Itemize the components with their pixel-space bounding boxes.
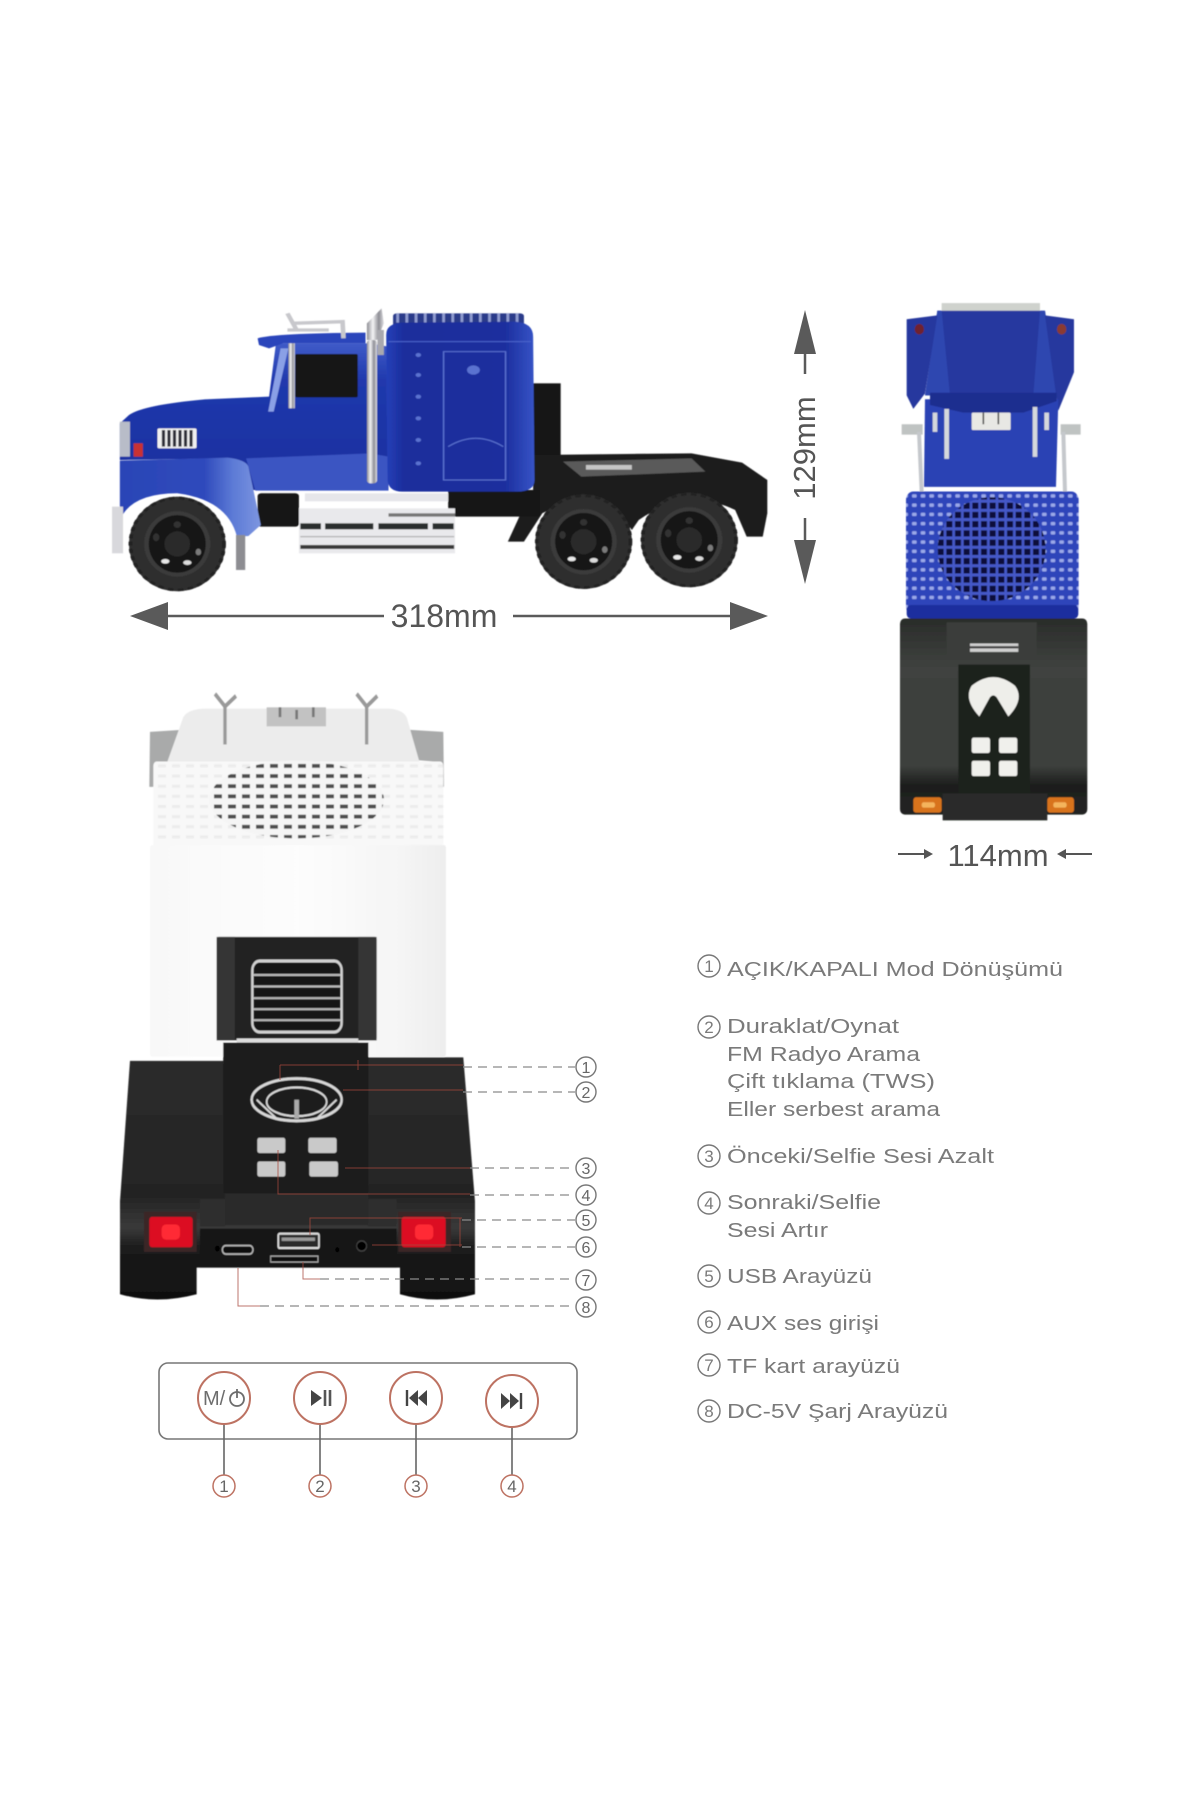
visor xyxy=(930,393,1057,413)
dimension: width 114mm xyxy=(898,838,1092,873)
callout numbers for ports: 2 xyxy=(582,1085,591,1102)
button numbers: 4 xyxy=(507,1477,517,1496)
wipers xyxy=(935,407,1047,459)
roof horn box xyxy=(267,707,326,726)
callout numbers for ports: 7 xyxy=(582,1273,591,1290)
legend item 7: 7 xyxy=(704,1356,714,1375)
button numbers: 2 xyxy=(315,1477,325,1496)
callout numbers for ports: 8 xyxy=(582,1300,591,1317)
speaker dots xyxy=(209,761,384,838)
button: mode and power: M/ xyxy=(203,1388,226,1410)
front fender xyxy=(120,458,261,537)
callout numbers for ports: 4 xyxy=(582,1188,591,1205)
button: next xyxy=(486,1375,538,1427)
black head xyxy=(217,937,377,1041)
red tail lights xyxy=(144,1212,451,1252)
callout 7 line xyxy=(303,1262,575,1279)
button numbers: 3 xyxy=(411,1477,421,1496)
callout 8 line xyxy=(238,1268,575,1306)
legend item 1: 1 xyxy=(704,957,714,976)
chrome bar xyxy=(237,1038,358,1043)
legend item 4: Sonraki/Selfie xyxy=(727,1192,881,1214)
orange lights xyxy=(913,797,1074,813)
hood xyxy=(925,311,1058,395)
dimension: length 318mm xyxy=(130,598,768,634)
hood and cab body xyxy=(120,343,388,490)
headlight and marker xyxy=(120,422,130,457)
top view of truck xyxy=(900,303,1087,820)
windshield pillar xyxy=(268,348,288,412)
panel outline xyxy=(159,1363,577,1439)
windscreen xyxy=(924,399,1058,487)
legend item 4 xyxy=(698,1192,881,1242)
legend item 5: USB Arayüzü xyxy=(727,1266,872,1288)
wheels xyxy=(129,493,737,591)
legend item 3: 3 xyxy=(704,1147,714,1166)
black chassis xyxy=(120,1043,475,1299)
side view of truck xyxy=(112,308,767,591)
dimension: height 129mm xyxy=(787,310,822,584)
steering icon xyxy=(969,677,1019,717)
buttons xyxy=(972,738,1017,776)
legend list xyxy=(698,955,1063,1423)
callout numbers for ports: 1 xyxy=(582,1060,591,1077)
centre panel xyxy=(223,1043,368,1193)
legend item 8 xyxy=(698,1400,948,1423)
callout 6 line xyxy=(372,1218,575,1247)
rear black tower xyxy=(531,383,561,463)
rear view of truck in white xyxy=(120,694,475,1299)
steering wheel xyxy=(252,1079,342,1121)
rear bumper xyxy=(943,793,1047,820)
exhaust stack xyxy=(367,308,384,483)
legend item 8: 8 xyxy=(704,1402,714,1421)
dimension: length 318mm: 318mm xyxy=(391,598,497,634)
legend item 3: Önceki/Selfie Sesi Azalt xyxy=(727,1146,995,1168)
mud flap xyxy=(236,535,245,570)
leader lines xyxy=(224,1424,512,1475)
side mirrors xyxy=(149,730,444,787)
callout lines for ports xyxy=(238,1060,575,1306)
callout numbers for ports: 6 xyxy=(582,1240,591,1257)
legend item 1 xyxy=(698,955,1063,981)
vent xyxy=(252,961,342,1032)
fender lamps xyxy=(915,324,924,335)
sleeper cabin xyxy=(386,313,535,492)
ports xyxy=(215,1234,367,1262)
button: play pause xyxy=(294,1372,346,1424)
speaker grille xyxy=(906,492,1079,618)
coupling xyxy=(947,622,1037,657)
cab roof xyxy=(167,709,420,764)
chassis xyxy=(900,618,1087,815)
dimension: height 129mm: 129mm xyxy=(787,396,822,500)
legend item 2: 2 xyxy=(704,1018,714,1037)
button: mode and power xyxy=(198,1372,250,1424)
cab lower black xyxy=(258,493,299,527)
legend item 1: AÇIK/KAPALI Mod Dönüşümü xyxy=(727,959,1063,981)
legend item 2: Eller serbest arama xyxy=(727,1099,941,1121)
cab window xyxy=(295,354,358,397)
callout numbers for ports: 3 xyxy=(582,1161,591,1178)
button: previous xyxy=(390,1372,442,1424)
legend item 6: 6 xyxy=(704,1313,714,1332)
legend item 6: AUX ses girişi xyxy=(727,1313,879,1335)
white cabin xyxy=(150,845,446,1057)
dimension: width 114mm: 114mm xyxy=(947,838,1049,873)
callout 5 line xyxy=(310,1218,575,1235)
legend item 2: FM Radyo Arama xyxy=(727,1044,921,1066)
button numbers: 1 xyxy=(219,1477,229,1496)
rear chassis and fender xyxy=(448,453,767,542)
hood top xyxy=(942,303,1040,312)
centre panel xyxy=(958,665,1030,795)
control buttons xyxy=(257,1138,338,1177)
legend item 5: 5 xyxy=(704,1267,714,1286)
control panel diagram xyxy=(159,1363,577,1497)
callout 2 line xyxy=(343,1090,575,1092)
callout numbers for ports: 5 xyxy=(582,1213,591,1230)
callout 4 line xyxy=(278,1150,575,1195)
mirrors xyxy=(902,424,1081,435)
roof horns xyxy=(287,313,343,338)
horn box xyxy=(972,413,1011,430)
legend item 2 xyxy=(698,1016,941,1121)
roof visor xyxy=(258,333,366,348)
step xyxy=(299,508,455,553)
chrome sill xyxy=(305,493,448,501)
callout numbers for ports xyxy=(576,1057,596,1317)
lower body band xyxy=(246,453,388,491)
legend item 6 xyxy=(698,1311,879,1335)
lower panel xyxy=(200,1194,397,1268)
legend item 4: Sesi Artır xyxy=(727,1220,828,1242)
legend item 7: TF kart arayüzü xyxy=(727,1356,900,1378)
grille on hood xyxy=(158,428,197,448)
legend item 2: Çift tıklama (TWS) xyxy=(727,1071,935,1093)
legend item 3 xyxy=(698,1145,995,1168)
roof posts xyxy=(215,694,377,745)
legend item 4: 4 xyxy=(704,1194,714,1213)
legend item 5 xyxy=(698,1265,872,1288)
callout 1 line xyxy=(280,1060,575,1080)
legend item 7 xyxy=(698,1354,900,1378)
callout 3 line xyxy=(345,1167,575,1169)
legend item 8: DC-5V Şarj Arayüzü xyxy=(727,1401,948,1423)
chrome bumper xyxy=(112,507,123,553)
white grille xyxy=(153,761,443,848)
legend item 2: Duraklat/Oynat xyxy=(727,1016,900,1038)
button numbers xyxy=(213,1475,523,1497)
